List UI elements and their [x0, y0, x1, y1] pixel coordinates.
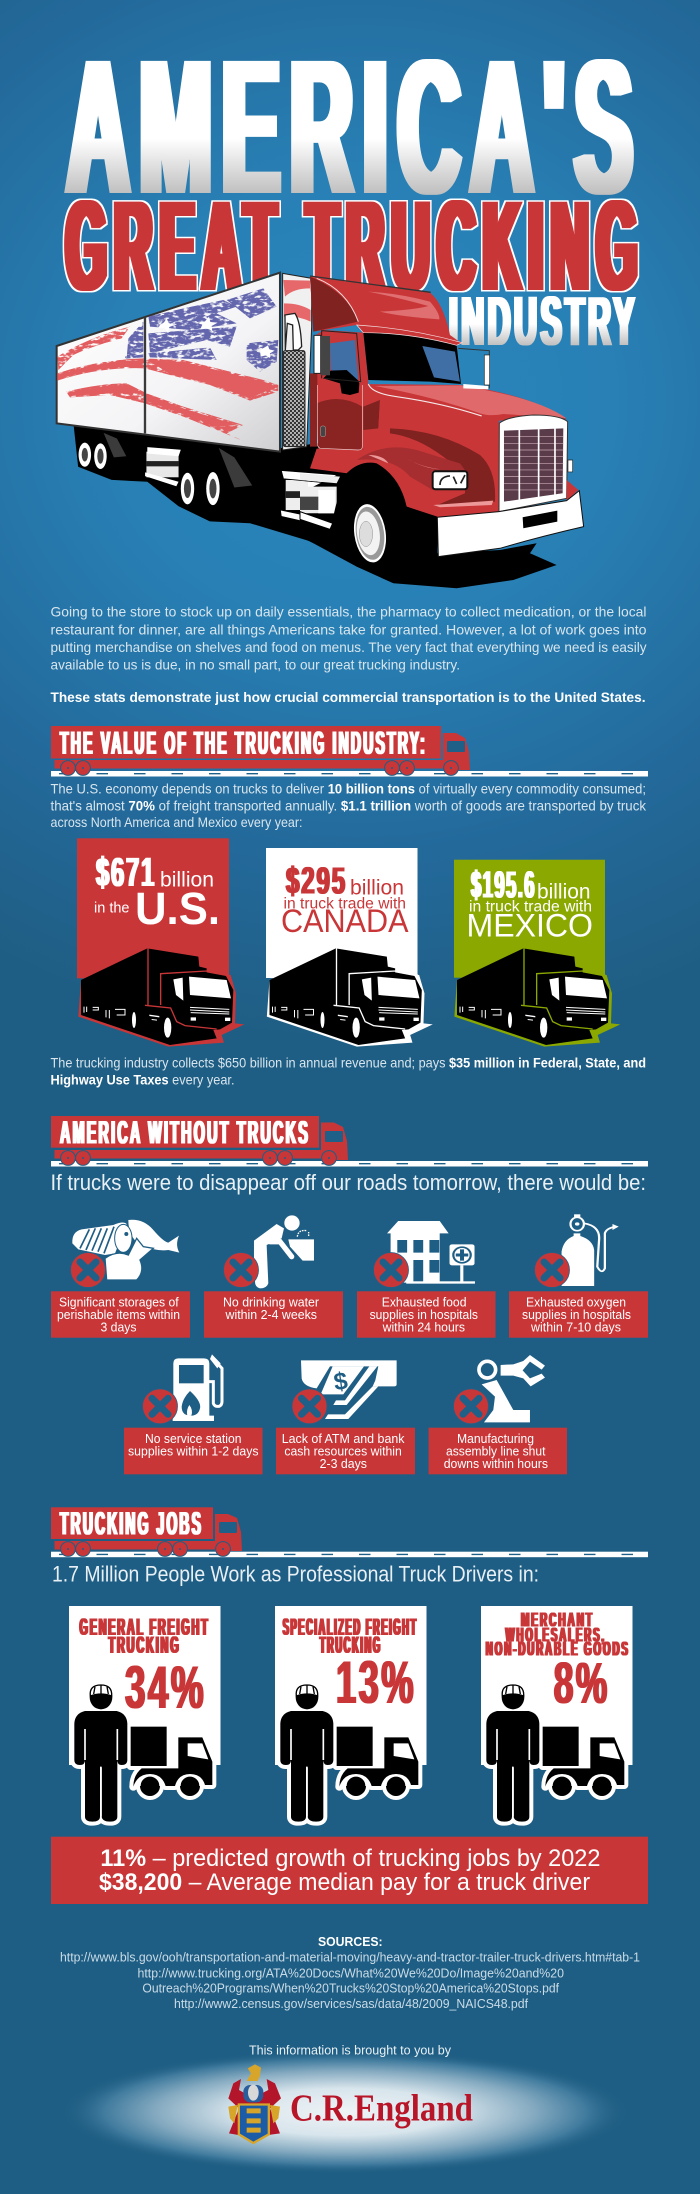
panel: specialized freight trucking: 13%	[336, 1649, 416, 1716]
value paragraph: across North America and Mexico every year:	[50, 814, 302, 830]
callout: hospital oxygen: supplies in hospitals	[522, 1307, 631, 1322]
section heading: trucking jobs	[51, 1505, 648, 1557]
callout: hospital food: supplies in hospitals	[370, 1307, 478, 1322]
icon: atm cash: $	[332, 1368, 350, 1396]
value paragraph	[50, 780, 647, 830]
panel: Canada trade: CANADA	[281, 903, 409, 939]
america without trucks subheading: If trucks were to disappear off our roads tomorrow, there would be:	[50, 1170, 646, 1195]
callout: perishable items: 3 days	[100, 1319, 137, 1334]
callout: perishable items: Significant storages of	[59, 1295, 179, 1310]
icon: x marks	[70, 1252, 570, 1424]
callout: hospital oxygen: Exhausted oxygen	[526, 1295, 626, 1310]
panel: Canada trade: in truck trade with	[284, 895, 406, 912]
icon: gas pump	[173, 1354, 222, 1421]
callout: atm cash	[276, 1428, 415, 1474]
callout: manufacturing: downs within hours	[444, 1456, 548, 1471]
callout: atm cash: Lack of ATM and bank	[282, 1431, 405, 1446]
brought to you by: This information is brought to you by	[249, 2042, 451, 2057]
panel: specialized freight trucking	[275, 1606, 426, 1822]
icon: hospital	[387, 1221, 475, 1284]
callout: atm cash: 2-3 days	[320, 1456, 367, 1471]
callout: hospital food: within 24 hours	[382, 1319, 465, 1334]
sources: SOURCES:	[318, 1935, 383, 1949]
sources: http://www.trucking.org/ATA%20Docs/What%20We%20Do/Image%20and%20	[138, 1966, 564, 1980]
logo: C.R.England wordmark: C.R.England	[290, 2088, 473, 2130]
callout: drinking water	[204, 1291, 343, 1338]
panel: Mexico trade: in truck trade with	[469, 899, 592, 916]
panel: Mexico trade	[454, 860, 620, 1047]
sources: http://www2.census.gov/services/sas/data/48/2009_NAICS48.pdf	[174, 1997, 529, 2011]
panel: Canada trade: $295	[286, 860, 347, 902]
illustration: red semi truck with american flag trailer	[57, 273, 584, 588]
panel: Canada trade	[266, 848, 433, 1047]
intro paragraph: available to us is due, in no small part, to our great trucking industry.	[50, 656, 460, 672]
callout: manufacturing	[429, 1428, 567, 1474]
panel: specialized freight trucking: TRUCKING	[320, 1632, 382, 1659]
callout: hospital food	[357, 1291, 496, 1338]
panel: Mexico trade: MEXICO	[466, 908, 593, 944]
callout: atm cash: cash resources within	[284, 1444, 402, 1459]
revenue paragraph: The trucking industry collects $650 billion in annual revenue and; pays $35 million in Federal, State, and	[50, 1055, 646, 1071]
value paragraph: that's almost 70% of freight transported annually. $1.1 trillion worth of goods are transported by truck	[50, 797, 647, 813]
logo: crest	[228, 2064, 281, 2144]
panel: general freight trucking: TRUCKING	[108, 1632, 180, 1659]
panel: US trade: billion	[160, 869, 214, 892]
revenue paragraph	[50, 1055, 646, 1087]
callout: drinking water: within 2-4 weeks	[225, 1307, 317, 1322]
panel: general freight trucking: 34%	[125, 1654, 206, 1721]
icon: atm cash	[301, 1360, 397, 1419]
logo glow	[60, 2050, 630, 2174]
panel: US trade: $671	[96, 849, 156, 895]
panel: Canada trade: billion	[350, 876, 404, 899]
panel: US trade: U.S.	[135, 883, 220, 934]
panel: Mexico trade: $195.6	[471, 864, 536, 906]
panel: US trade: in the	[94, 900, 130, 917]
icon: robot arm	[479, 1355, 545, 1422]
callout: service stations: No service station	[145, 1431, 242, 1446]
section heading: america without trucks: AMERICA WITHOUT TRUCKS	[60, 1114, 310, 1150]
callout: job growth and median pay	[51, 1837, 648, 1904]
callout: service stations: supplies within 1-2 days	[128, 1444, 259, 1459]
panel: merchant wholesalers	[481, 1606, 632, 1822]
intro bold statement: These stats demonstrate just how crucial commercial transportation is to the United States.	[50, 689, 646, 705]
panel: Mexico trade: billion	[537, 880, 590, 903]
panel: merchant wholesalers: MERCHANT	[521, 1610, 594, 1632]
value paragraph: The U.S. economy depends on trucks to deliver 10 billion tons of virtually every commodity consumed;	[50, 780, 646, 796]
icon: no drinking water	[254, 1215, 314, 1288]
text: SPECIALIZED FREIGHT	[283, 1614, 418, 1641]
panel: general freight trucking	[69, 1606, 220, 1822]
callout: service stations	[124, 1428, 262, 1474]
callout: job growth and median pay: $38,200 – Average median pay for a truck driver	[99, 1869, 590, 1896]
sources	[60, 1935, 640, 2011]
text: GENERAL FREIGHT	[80, 1614, 210, 1641]
intro paragraph: restaurant for dinner, are all things Americans take for granted. However, a lot of work goes into	[50, 621, 647, 637]
callout: hospital food: Exhausted food	[382, 1295, 466, 1310]
callout: hospital oxygen: within 7-10 days	[530, 1319, 621, 1334]
callout: manufacturing: Manufacturing	[457, 1431, 534, 1446]
intro paragraph: putting merchandise on shelves and food on menus. The very fact that everything we need is easily	[50, 639, 646, 655]
callout: job growth and median pay: 11% – predicted growth of trucking jobs by 2022	[100, 1845, 600, 1872]
callout: perishable items	[51, 1291, 190, 1338]
revenue paragraph: Highway Use Taxes every year.	[50, 1071, 234, 1087]
callout: manufacturing: assembly line shut	[446, 1444, 546, 1459]
sources: http://www.bls.gov/ooh/transportation-and-material-moving/heavy-and-tractor-trailer-truck-drivers.htm#tab-1	[60, 1951, 640, 1965]
panel: merchant wholesalers: 8%	[554, 1651, 610, 1716]
icon: perishable food	[72, 1220, 179, 1280]
intro paragraph	[50, 604, 647, 672]
sources: Outreach%20Programs/When%20Trucks%20Stop%20America%20Stops.pdf	[142, 1982, 560, 1996]
section heading: trucking jobs: TRUCKING JOBS	[60, 1505, 203, 1541]
callout: hospital oxygen	[509, 1291, 648, 1338]
trucking jobs subheading: 1.7 Million People Work as Professional Truck Drivers in:	[52, 1562, 539, 1587]
section heading: america without trucks	[51, 1114, 648, 1166]
callout: perishable items: perishable items within	[57, 1307, 180, 1322]
intro paragraph: Going to the store to stock up on daily essentials, the pharmacy to collect medication, or the local	[50, 604, 646, 620]
section heading: the value of the trucking industry	[51, 725, 648, 776]
callout: drinking water: No drinking water	[223, 1295, 320, 1310]
panel: US trade	[77, 838, 244, 1047]
icon: oxygen tank	[562, 1214, 619, 1286]
